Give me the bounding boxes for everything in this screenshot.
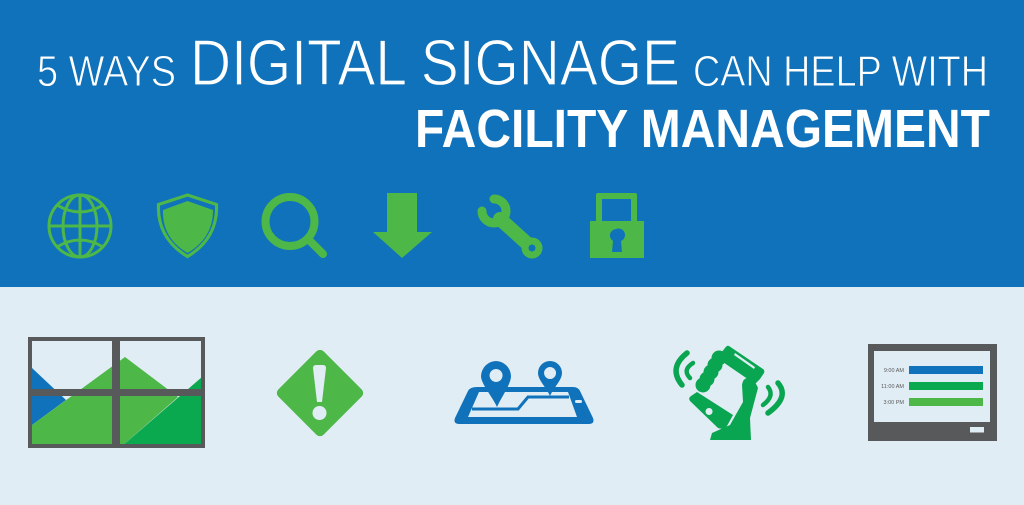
schedule row: 11:00 AM: 11:00 AM [881,384,904,390]
schedule row: 3:00 PM: 3:00 PM [884,400,904,406]
icon: alert diamond [275,348,365,438]
icon: shield [158,195,217,256]
panel: blue header band [0,0,1024,287]
icon: down arrow [373,193,432,258]
title [37,26,990,159]
icon: hand holding vibrating phone [676,346,782,440]
icon: magnifying glass [266,197,323,254]
icon: window with mountains [29,338,204,447]
title: DIGITAL SIGNAGE [190,26,680,99]
icon: schedule display [868,344,997,441]
icon: map on tablet with pins [454,361,594,424]
panel: light lower band [0,287,1024,505]
icon: globe [49,195,111,257]
icon: wrench [482,199,542,258]
icon: padlock [590,193,644,258]
title: 5 WAYS [37,47,176,96]
schedule row: 9:00 AM: 9:00 AM [884,368,904,374]
